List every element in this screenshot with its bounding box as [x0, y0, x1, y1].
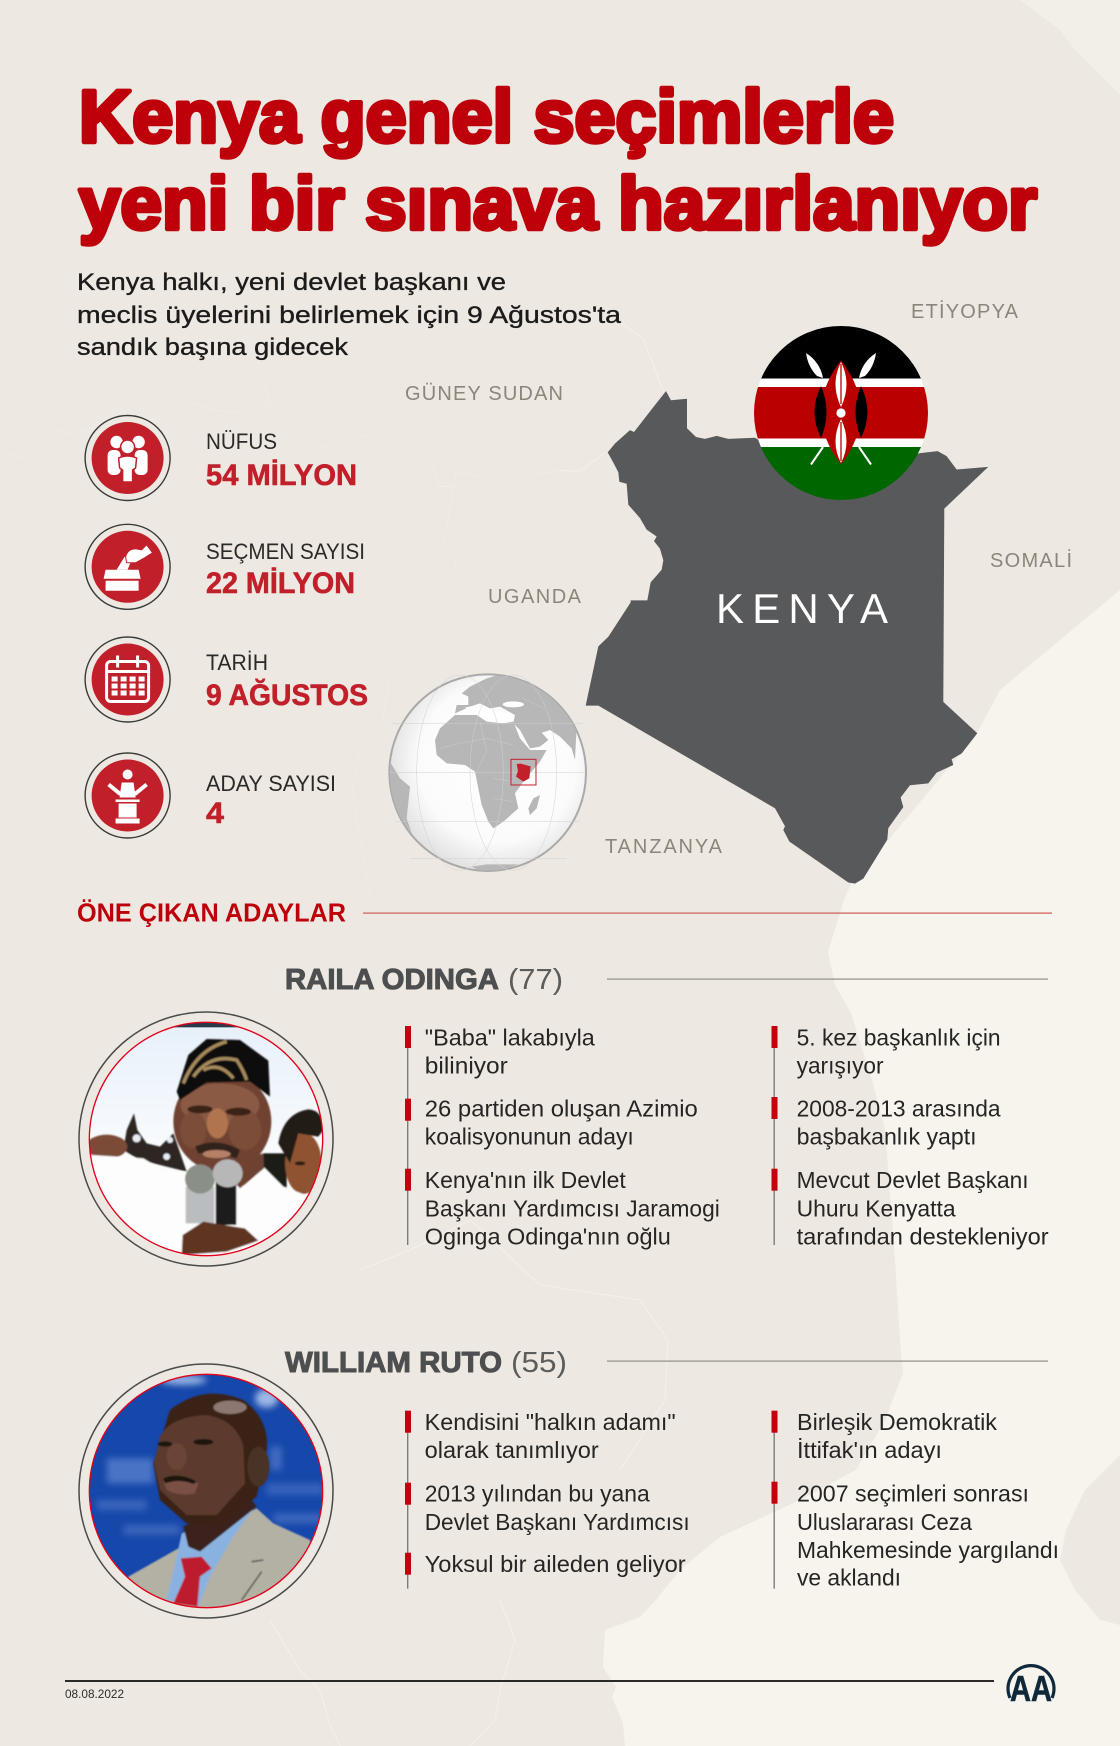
candidate name: Raila Odinga: RAILA ODINGA: [285, 964, 499, 996]
title: Kenya genel seçimlerle: [79, 75, 894, 158]
candidate name: William Ruto: (55): [511, 1347, 567, 1379]
bullets: William Ruto right column: Uluslararası Ceza: [797, 1509, 972, 1535]
map: Kenya: KENYA: [716, 585, 888, 632]
bullets: William Ruto right column: İttifak'ın adayı: [797, 1437, 942, 1463]
stat: date: [85, 637, 368, 722]
candidate name: Raila Odinga: [285, 964, 1048, 996]
bullets: Raila Odinga right column: Mevcut Devlet Başkanı: [797, 1167, 1029, 1193]
bullets: William Ruto right column: [772, 1409, 1059, 1591]
neighbouring country labels: GÜNEY SUDAN: [405, 383, 563, 405]
footer rule and date: 08.08.2022: [65, 1689, 124, 1701]
stat: candidates: ADAY SAYISI: [206, 771, 336, 796]
subtitle: [77, 269, 622, 361]
bullets: William Ruto left column: [405, 1409, 690, 1589]
bullets: William Ruto right column: Mahkemesinde yargılandı: [797, 1537, 1059, 1563]
title: [79, 75, 1037, 245]
bullets: Raila Odinga right column: yarışıyor: [797, 1052, 884, 1078]
bullets: Raila Odinga right column: 5. kez başkanlık için: [797, 1024, 1001, 1050]
bullets: William Ruto left column: Devlet Başkanı Yardımcısı: [425, 1509, 690, 1535]
neighbouring country labels: UGANDA: [488, 586, 582, 608]
bullets: William Ruto left column: 2013 yılından bu yana: [425, 1481, 650, 1507]
icon: AA logo: AA: [1010, 1668, 1052, 1709]
icon: ballot box: [85, 524, 170, 609]
bullets: Raila Odinga left column: Başkanı Yardımcısı Jaramogi: [425, 1196, 720, 1222]
neighbouring country labels: ETİYOPYA: [911, 300, 1019, 323]
bullets: Raila Odinga left column: 26 partiden oluşan Azimio: [425, 1096, 698, 1122]
icon: people: [85, 416, 170, 500]
neighbouring country labels: TANZANYA: [605, 836, 723, 858]
stat: population: [85, 416, 357, 500]
stat: voters: SEÇMEN SAYISI: [206, 539, 365, 564]
bullets: William Ruto right column: 2007 seçimleri sonrası: [797, 1481, 1029, 1507]
icon: Kenyan flag: [750, 326, 932, 501]
heading: featured candidates: ÖNE ÇIKAN ADAYLAR: [77, 898, 346, 928]
candidate name: William Ruto: [285, 1347, 1048, 1379]
subtitle: sandık başına gidecek: [77, 334, 349, 361]
photo: Raila Odinga: [79, 1012, 333, 1266]
candidate name: Raila Odinga: (77): [508, 964, 563, 996]
subtitle: meclis üyelerini belirlemek için 9 Ağustos'ta: [77, 302, 622, 329]
stat: voters: 22 MİLYON: [206, 567, 355, 600]
bullets: Raila Odinga left column: Kenya'nın ilk Devlet: [425, 1167, 626, 1193]
bullets: William Ruto right column: Birleşik Demokratik: [797, 1409, 997, 1435]
icon: podium speaker: [85, 753, 170, 838]
icon: globe locating Kenya: [389, 673, 586, 871]
stat: voters: [85, 524, 365, 609]
bullets: Raila Odinga right column: tarafından destekleniyor: [797, 1224, 1049, 1250]
bullets: Raila Odinga left column: Oginga Odinga'nın oğlu: [425, 1224, 671, 1250]
icon: calendar: [85, 637, 170, 722]
bullets: Raila Odinga left column: koalisyonunun adayı: [425, 1124, 634, 1150]
bullets: Raila Odinga right column: [772, 1024, 1049, 1250]
bullets: William Ruto left column: Kendisini "halkın adamı": [425, 1409, 676, 1435]
bullets: Raila Odinga right column: başbakanlık yaptı: [797, 1124, 977, 1150]
bullets: William Ruto right column: ve aklandı: [797, 1565, 901, 1591]
neighbouring country labels: [405, 300, 1072, 858]
stat: population: NÜFUS: [206, 429, 277, 454]
bullets: Raila Odinga left column: "Baba" lakabıyla: [425, 1024, 595, 1050]
land: [389, 673, 577, 871]
map: Kenya: [586, 391, 988, 884]
stat: candidates: 4: [206, 797, 224, 830]
title: yeni bir sınava hazırlanıyor: [79, 162, 1037, 245]
stat: date: 9 AĞUSTOS: [206, 678, 368, 712]
neighbouring country labels: SOMALİ: [990, 549, 1072, 572]
bullets: Raila Odinga right column: 2008-2013 arasında: [797, 1096, 1001, 1122]
stat: population: 54 MİLYON: [206, 459, 357, 492]
bullets: Raila Odinga right column: Uhuru Kenyatta: [797, 1196, 956, 1222]
bullets: Raila Odinga left column: biliniyor: [425, 1052, 508, 1078]
bullets: William Ruto left column: Yoksul bir aileden geliyor: [425, 1551, 686, 1577]
candidate name: William Ruto: WILLIAM RUTO: [285, 1347, 502, 1379]
bullets: William Ruto left column: olarak tanımlıyor: [425, 1437, 599, 1463]
stat: candidates: [85, 753, 336, 838]
photo: William Ruto: [79, 1364, 333, 1618]
bullets: Raila Odinga left column: [405, 1024, 720, 1250]
subtitle: Kenya halkı, yeni devlet başkanı ve: [77, 269, 506, 296]
stat: date: TARİH: [206, 650, 268, 675]
